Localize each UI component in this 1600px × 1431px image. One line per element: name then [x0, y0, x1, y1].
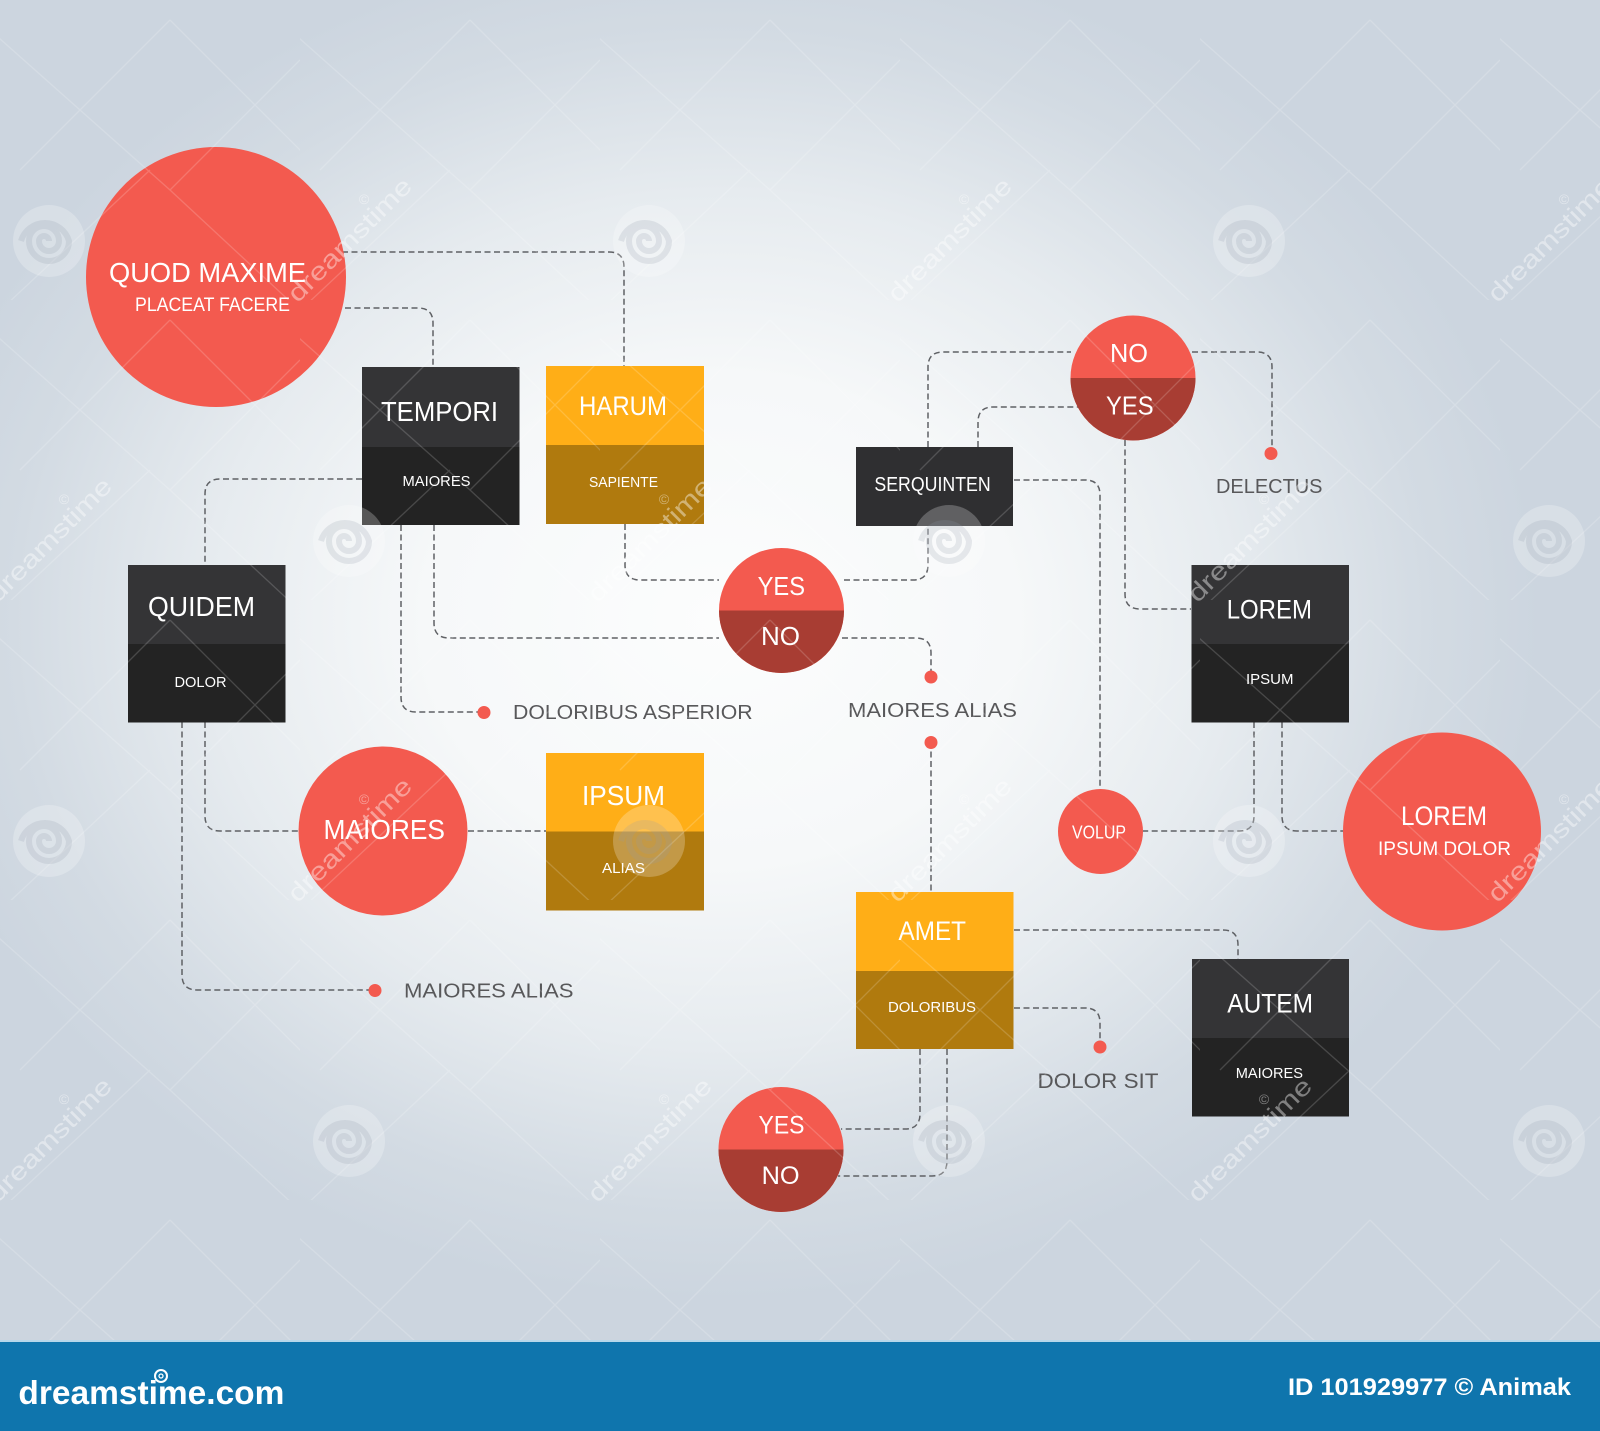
box: Lorem: LOREM — [1227, 595, 1312, 625]
watermark text: dreamstime — [1182, 1072, 1318, 1208]
box: Quidem: QUIDEM — [148, 591, 255, 622]
watermark text: © — [659, 1091, 670, 1107]
end point: Maiores Alias centre: MAIORES ALIAS — [848, 700, 1017, 722]
box: Autem: AUTEM — [1227, 989, 1313, 1019]
watermark text: dreamstime — [882, 172, 1018, 308]
circle: Maiores: MAIORES — [324, 814, 445, 845]
watermark text: dreamstime — [582, 472, 718, 608]
box: Amet — [856, 892, 1014, 1049]
watermark text: © — [359, 791, 370, 807]
watermark text — [0, 172, 1600, 1208]
box: Serquinten: SERQUINTEN — [874, 474, 991, 496]
circle: Quod Maxime — [86, 147, 346, 407]
circle: Lorem Ipsum Dolor: LOREM — [1401, 801, 1487, 831]
decision circle: No / Yes — [1070, 316, 1196, 441]
box: Tempori: TEMPORI — [381, 396, 498, 427]
watermark text: © — [59, 491, 70, 507]
box: Ipsum: ALIAS — [602, 860, 645, 877]
footer credit: ID 101929977 © Animak — [1288, 1374, 1572, 1401]
box: Harum — [546, 366, 704, 524]
watermark text: dreamstime — [882, 772, 1018, 908]
decision circle: No / Yes: YES — [1106, 390, 1154, 420]
decision circle: Yes / No: YES — [758, 571, 805, 601]
box: Autem: MAIORES — [1236, 1065, 1303, 1082]
circle: Quod Maxime: QUOD MAXIME — [109, 257, 306, 288]
box: Serquinten — [856, 447, 1013, 526]
watermark text: © — [59, 1091, 70, 1107]
circle: Lorem Ipsum Dolor — [1343, 732, 1541, 930]
circle: Quod Maxime: PLACEAT FACERE — [135, 295, 290, 316]
watermark text: dreamstime — [1482, 172, 1600, 308]
box: Ipsum — [546, 753, 704, 910]
box: Harum: HARUM — [579, 391, 667, 421]
footer band — [0, 1340, 1600, 1431]
watermark text: © — [659, 491, 670, 507]
watermark text: dreamstime — [1482, 772, 1600, 908]
watermark text: © — [1559, 791, 1570, 807]
end point: Dolor Sit: DOLOR SIT — [1038, 1070, 1159, 1093]
end point: Doloribus Asperior: DOLORIBUS ASPERIOR — [513, 702, 753, 724]
box: Tempori — [362, 367, 520, 525]
box: Quidem — [128, 565, 286, 722]
box: Harum: SAPIENTE — [589, 474, 658, 491]
decision circle: Yes / No — [719, 548, 844, 673]
footer logo: dreamstime.com — [18, 1374, 284, 1411]
end point: Delectus: DELECTUS — [1216, 476, 1322, 498]
decision circle: Yes / No: NO — [761, 621, 800, 651]
watermark text: © — [1259, 491, 1270, 507]
watermark text: © — [1259, 1091, 1270, 1107]
watermark text: © — [959, 191, 970, 207]
circle: Volup: VOLUP — [1072, 823, 1126, 843]
box: Autem — [1192, 959, 1349, 1116]
decision circle: No / Yes: NO — [1110, 338, 1148, 368]
watermark text: © — [959, 791, 970, 807]
watermark spirals — [13, 205, 1585, 1177]
box: Amet: AMET — [898, 916, 966, 946]
end point: Dolor Sit — [1038, 1040, 1159, 1093]
circle: Lorem Ipsum Dolor: IPSUM DOLOR — [1378, 839, 1511, 860]
end point: Maiores Alias left: MAIORES ALIAS — [404, 980, 574, 1002]
box: Ipsum: IPSUM — [582, 780, 665, 811]
box: Tempori: MAIORES — [402, 473, 470, 490]
box: Lorem: IPSUM — [1246, 671, 1294, 688]
connectors — [182, 252, 1343, 1176]
watermark text: © — [1559, 191, 1570, 207]
decision circle: lower Yes / No: NO — [762, 1162, 800, 1190]
box: Lorem — [1192, 565, 1349, 722]
watermark text: © — [359, 191, 370, 207]
watermark text: dreamstime — [1182, 472, 1318, 608]
decision circle: lower Yes / No — [718, 1087, 844, 1212]
watermark text: dreamstime — [582, 1072, 718, 1208]
watermark text: dreamstime — [282, 172, 418, 308]
box: Amet: DOLORIBUS — [888, 999, 976, 1016]
end point: Maiores Alias centre — [848, 670, 1017, 749]
circle: Volup — [1058, 789, 1143, 874]
end point: Delectus — [1216, 447, 1322, 498]
circle: Maiores — [298, 746, 468, 916]
watermark text: dreamstime — [282, 772, 418, 908]
box: Quidem: DOLOR — [174, 674, 227, 691]
decision circle: lower Yes / No: YES — [758, 1112, 804, 1140]
